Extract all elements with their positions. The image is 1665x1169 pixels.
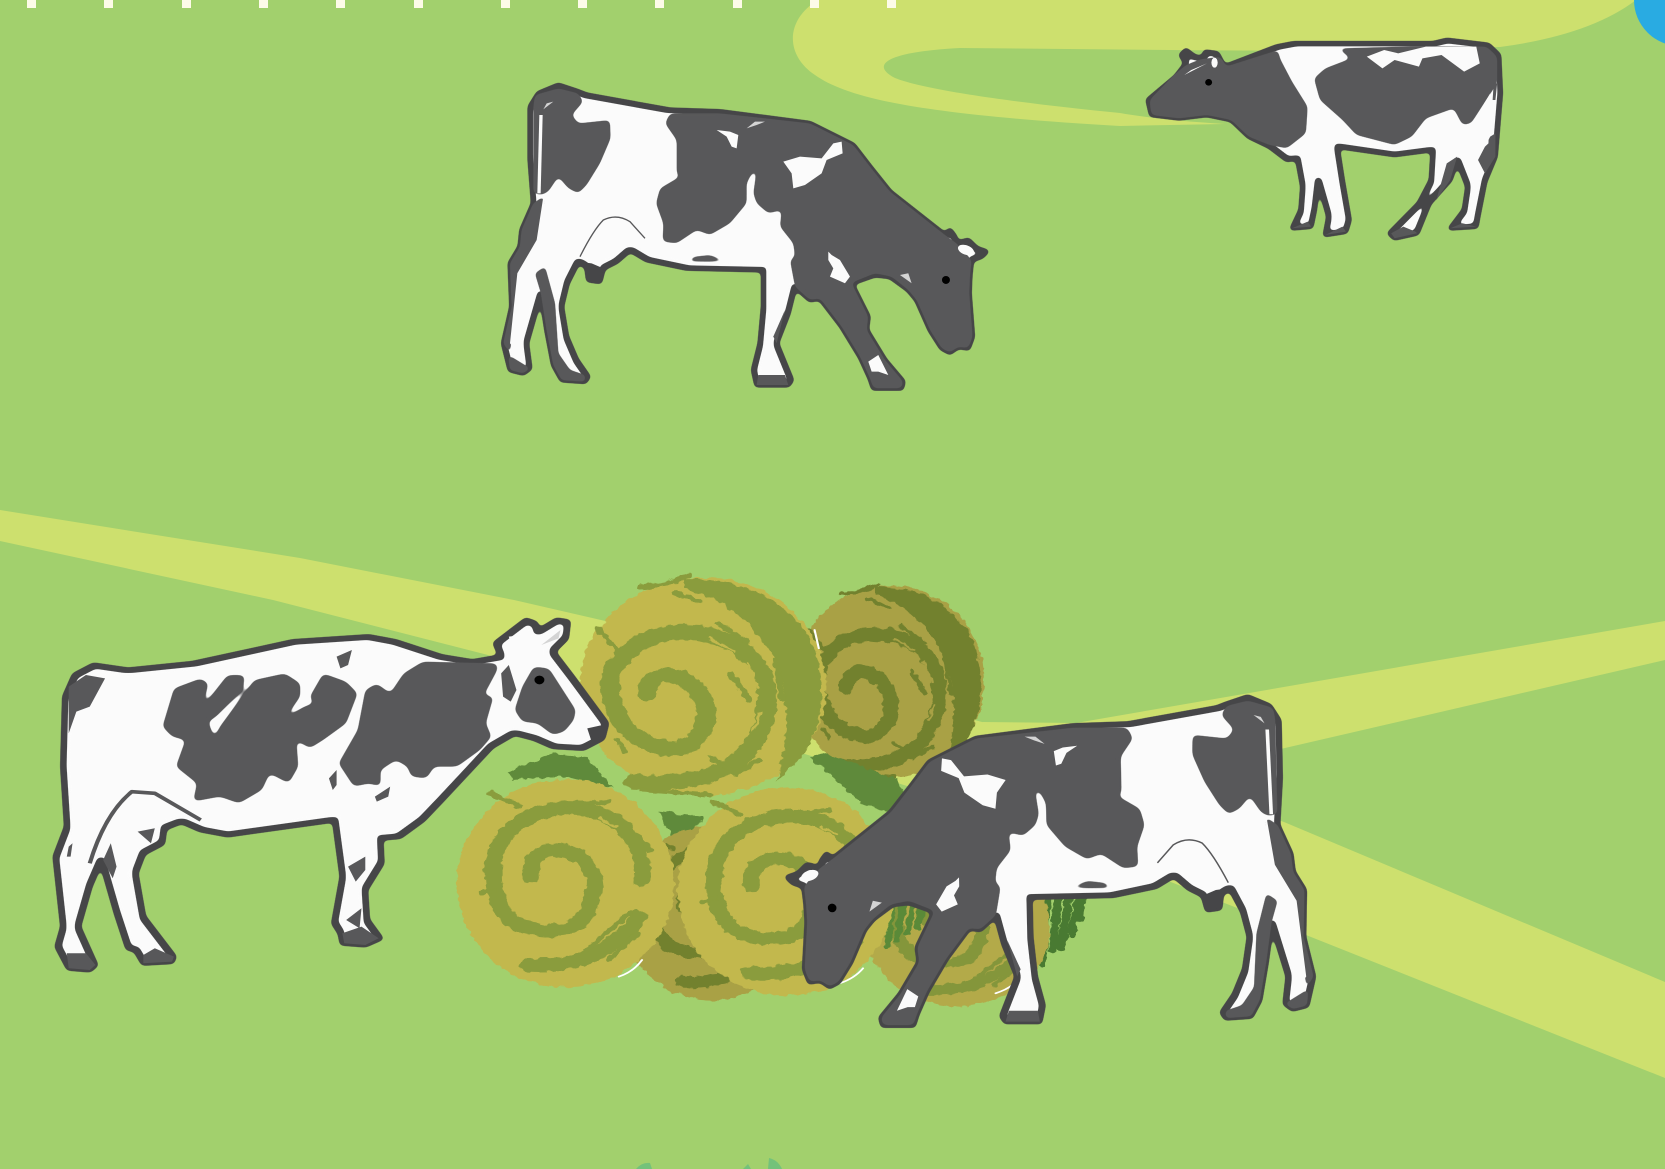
road: winding top path xyxy=(793,0,1636,126)
small spots xyxy=(329,650,516,928)
back white patch xyxy=(1367,47,1480,72)
rear white sliver xyxy=(1478,93,1490,147)
cow: grazing, top centre xyxy=(503,85,987,388)
head highlight xyxy=(1184,63,1207,75)
body outline xyxy=(1148,40,1501,238)
ear highlight xyxy=(1211,58,1218,68)
road: lower diagonal path xyxy=(0,510,1665,1078)
cow: standing, top right xyxy=(1148,40,1501,238)
ear grey xyxy=(541,630,560,645)
body marking xyxy=(162,673,358,803)
hay: front lower right bale xyxy=(678,788,895,996)
blue circle in top right corner xyxy=(1634,0,1665,46)
nose xyxy=(587,725,603,740)
hay: highlights xyxy=(619,630,1012,993)
flank crease xyxy=(90,792,201,863)
hay: back lower right bale xyxy=(865,847,1050,1007)
fence posts along top edge xyxy=(27,0,896,8)
eye xyxy=(534,676,544,684)
body white xyxy=(1148,40,1501,238)
hay: back top bale xyxy=(795,584,984,778)
shoulder marking xyxy=(339,662,497,787)
face marking xyxy=(515,667,576,735)
cow: standing, left, facing hay xyxy=(55,620,606,970)
cow: grazing, lower right, in front of hay xyxy=(783,697,1315,1025)
hay: back lower middle bale xyxy=(622,826,801,1001)
hay: green filler behind bales xyxy=(507,753,916,950)
grass tufts at bottom edge xyxy=(636,1158,782,1169)
body marking xyxy=(1314,46,1497,145)
hooves and leg shading xyxy=(67,828,379,970)
hooves xyxy=(1292,222,1476,238)
rear details xyxy=(1436,83,1497,200)
eye xyxy=(1205,79,1212,86)
hay: dark green straw at right xyxy=(1042,895,1084,963)
head and neck marking xyxy=(1150,50,1308,148)
body white xyxy=(55,620,606,970)
ear white xyxy=(509,635,522,657)
rump marking xyxy=(69,675,105,733)
hay: green straw on lower right bale xyxy=(887,905,922,947)
hay bale stack xyxy=(457,575,1084,1007)
hay: front lower left bale xyxy=(457,779,674,987)
hay: front top bale xyxy=(580,575,826,796)
road: right branch xyxy=(982,621,1665,790)
body outline xyxy=(55,620,606,970)
